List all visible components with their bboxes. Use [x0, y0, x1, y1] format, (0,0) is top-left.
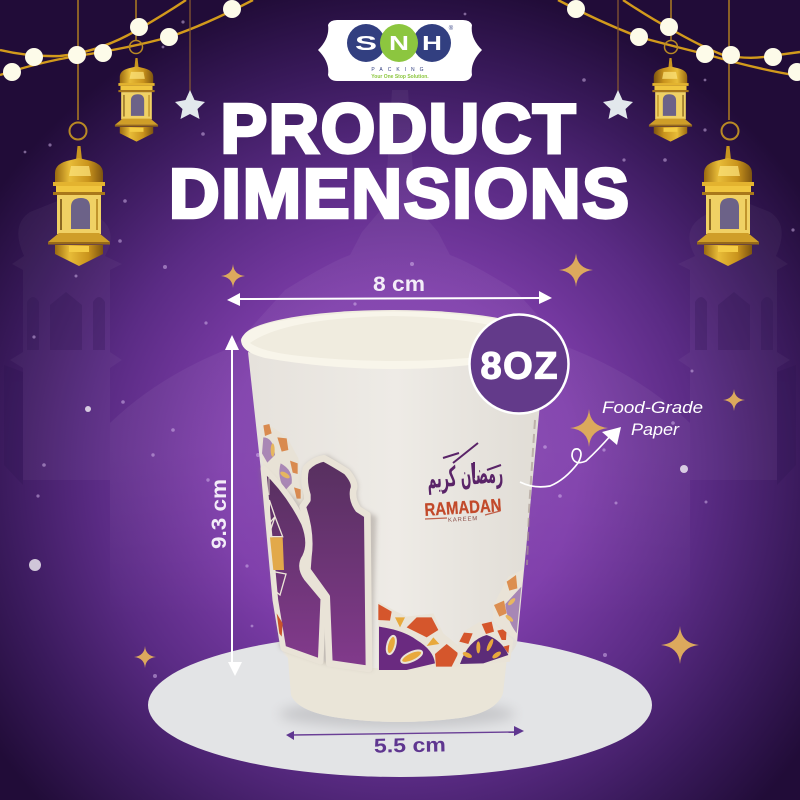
logo: Ramadan Kareem	[424, 443, 504, 524]
arrow: 8 cm width	[227, 273, 552, 306]
title	[169, 90, 629, 232]
large glowing dots	[29, 406, 688, 571]
arch frame shadow	[260, 455, 377, 671]
arrow: 9.3 cm height	[208, 335, 242, 676]
cup rim	[241, 312, 546, 369]
lantern: large right	[697, 122, 759, 266]
logo: Ramadan Kareem: KAREEM	[448, 516, 478, 524]
callout: 8OZ badge	[470, 314, 568, 414]
light bulbs	[3, 0, 800, 81]
callout: food-grade paper: Food-Grade	[602, 398, 703, 417]
logo: N	[389, 33, 409, 55]
logo: S	[355, 33, 377, 55]
cup decoration	[260, 423, 523, 671]
title: DIMENSIONS	[169, 154, 629, 232]
lantern: large left	[48, 122, 110, 266]
arch window right	[303, 458, 369, 669]
right hanging strings	[558, 0, 800, 120]
logo: ®	[449, 25, 454, 32]
logo: PACKING	[371, 67, 429, 73]
rosette: bottom right	[457, 622, 513, 667]
left hanging strings	[0, 0, 253, 120]
cup: رمضان كريم	[425, 456, 504, 495]
cup right edge pattern	[527, 420, 535, 565]
arrow: 9.3 cm height: 9.3 cm	[208, 479, 231, 549]
arrow: 5.5 cm base	[286, 726, 524, 758]
callout: food-grade paper: Paper	[631, 420, 680, 439]
lantern: small left	[115, 40, 158, 142]
rosette: bottom centre	[378, 602, 462, 671]
cup shadow	[279, 700, 515, 728]
white disk platform	[148, 633, 652, 777]
icon: silver star left	[175, 90, 205, 119]
icon: lantern on cup	[268, 477, 286, 637]
arrow: 8 cm width: 8 cm	[373, 273, 425, 296]
rosette: upper left	[260, 423, 308, 505]
logo: Ramadan Kareem: RAMADAN	[424, 495, 502, 520]
mosque silhouettes	[4, 90, 796, 620]
lantern: small right	[649, 40, 692, 142]
cup inner opening	[243, 310, 543, 366]
icon: silver star right	[603, 90, 633, 119]
rosette: right edge	[493, 569, 523, 641]
arrow: 5.5 cm base: 5.5 cm	[374, 734, 446, 758]
cup base band	[284, 650, 513, 722]
cup body	[248, 352, 545, 722]
logo	[318, 20, 482, 81]
title: PRODUCT	[220, 90, 576, 168]
cup	[241, 310, 546, 722]
arch window left	[263, 468, 323, 662]
logo: Your One Stop Solution.	[371, 74, 429, 80]
logo: H	[422, 33, 442, 55]
callout: 8OZ badge: 8OZ	[480, 346, 558, 388]
gold sparkles	[134, 253, 745, 668]
callout: food-grade paper	[520, 398, 703, 487]
